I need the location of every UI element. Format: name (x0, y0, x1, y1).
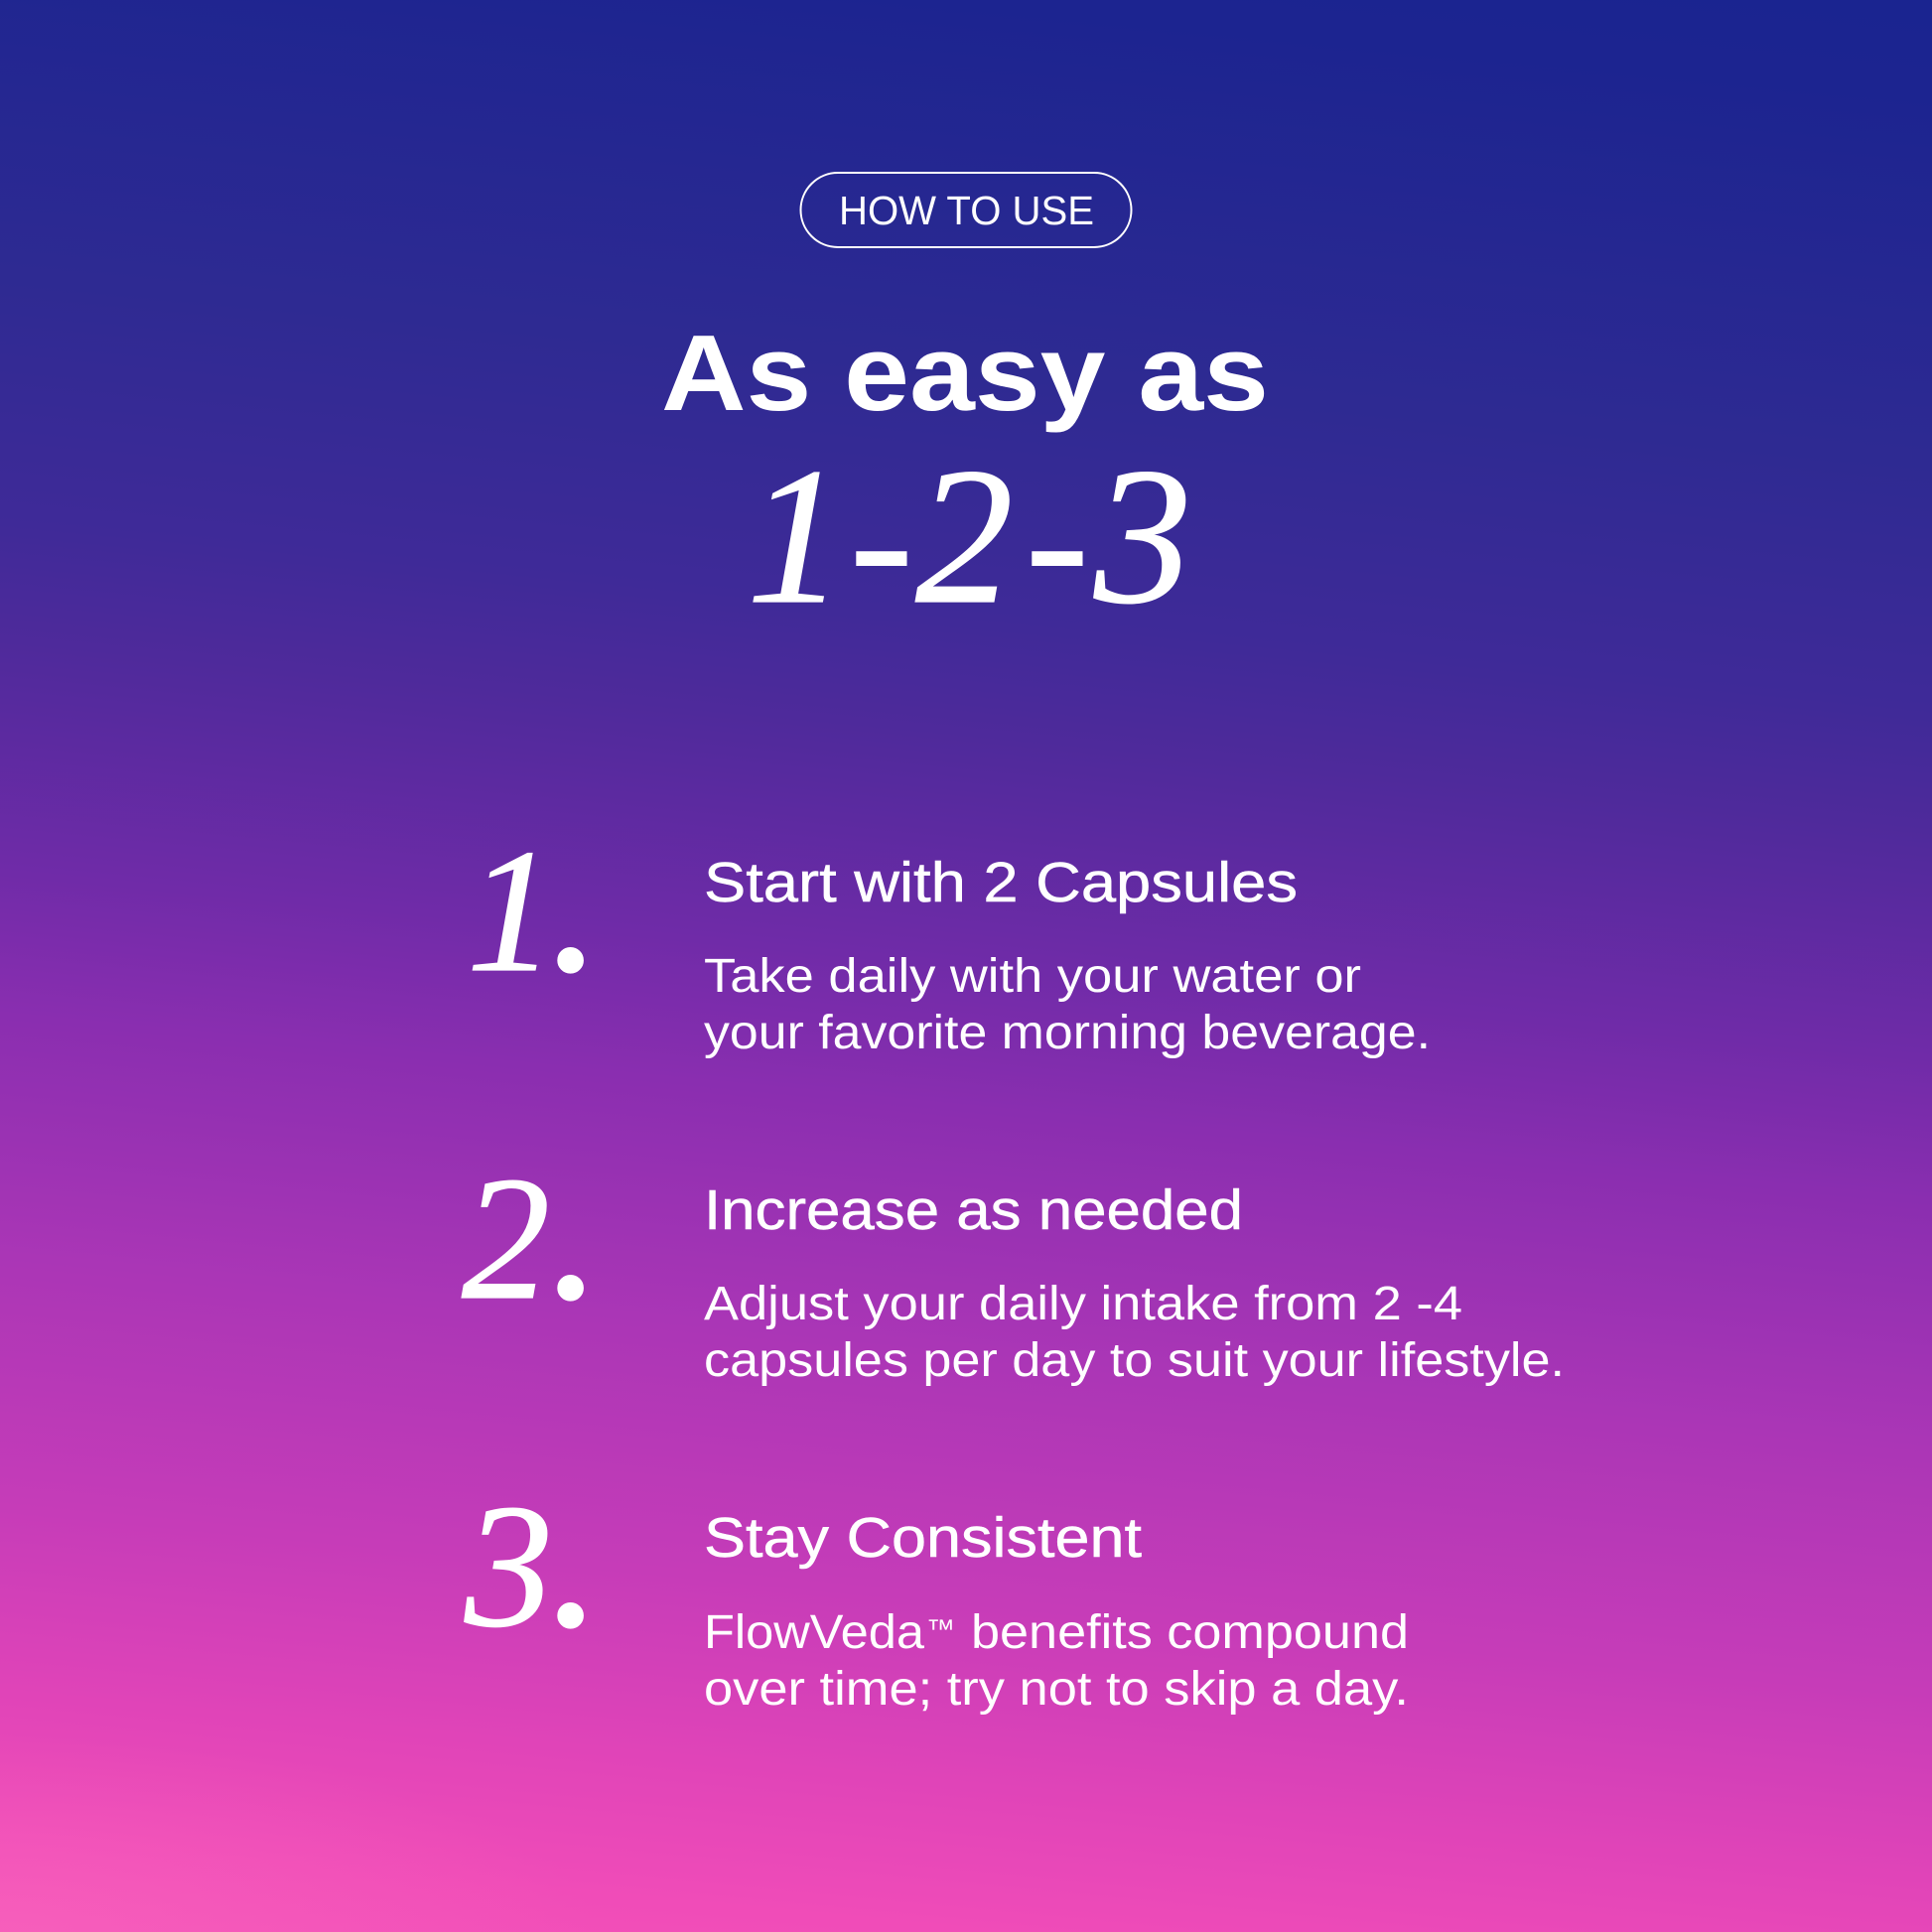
step 2 numeral: . (549, 1107, 603, 1344)
step 3 description (704, 1606, 1409, 1716)
step 3 description: FlowVeda (704, 1606, 924, 1659)
step 2 (462, 1107, 1565, 1387)
step 1 numeral: . (549, 779, 603, 1017)
title numerals 1-2-3 (747, 427, 1191, 647)
title numerals 1-2-3: 2 (915, 427, 1013, 644)
step 2 title: Increase as needed (704, 1178, 1243, 1242)
step 2 numeral (462, 1107, 603, 1344)
step 3 (464, 1435, 1409, 1716)
step 1 numeral (467, 779, 603, 1017)
step 3 title: Stay Consistent (704, 1506, 1142, 1570)
step 2 numeral: 2 (462, 1140, 550, 1336)
step 3 description: ™ (926, 1614, 955, 1644)
step 1 title: Start with 2 Capsules (704, 851, 1298, 914)
step 3 numeral: . (549, 1435, 603, 1672)
step 3 numeral: 3 (464, 1467, 553, 1664)
badge: how to use (800, 173, 1132, 247)
step 3 numeral (464, 1435, 603, 1672)
step 1 description: your favorite morning beverage. (704, 1007, 1431, 1059)
step 3 description: over time; try not to skip a day. (704, 1663, 1409, 1716)
step 2 description (704, 1278, 1565, 1387)
heading: As easy as (661, 313, 1269, 434)
badge: how to use: HOW TO USE (839, 188, 1094, 233)
step 1 description: Take daily with your water or (704, 950, 1361, 1003)
step 1 description (704, 950, 1431, 1059)
title numerals 1-2-3: 1 (747, 427, 844, 644)
step 2 description: Adjust your daily intake from 2 -4 (704, 1278, 1462, 1330)
title numerals 1-2-3: 3 (1093, 427, 1191, 644)
step 1 numeral: 1 (467, 812, 555, 1009)
step 1 (467, 779, 1431, 1059)
step 2 description: capsules per day to suit your lifestyle. (704, 1334, 1565, 1387)
step 3 description: benefits compound (971, 1606, 1409, 1659)
title numerals 1-2-3: - (849, 430, 914, 647)
title numerals 1-2-3: - (1025, 430, 1090, 647)
